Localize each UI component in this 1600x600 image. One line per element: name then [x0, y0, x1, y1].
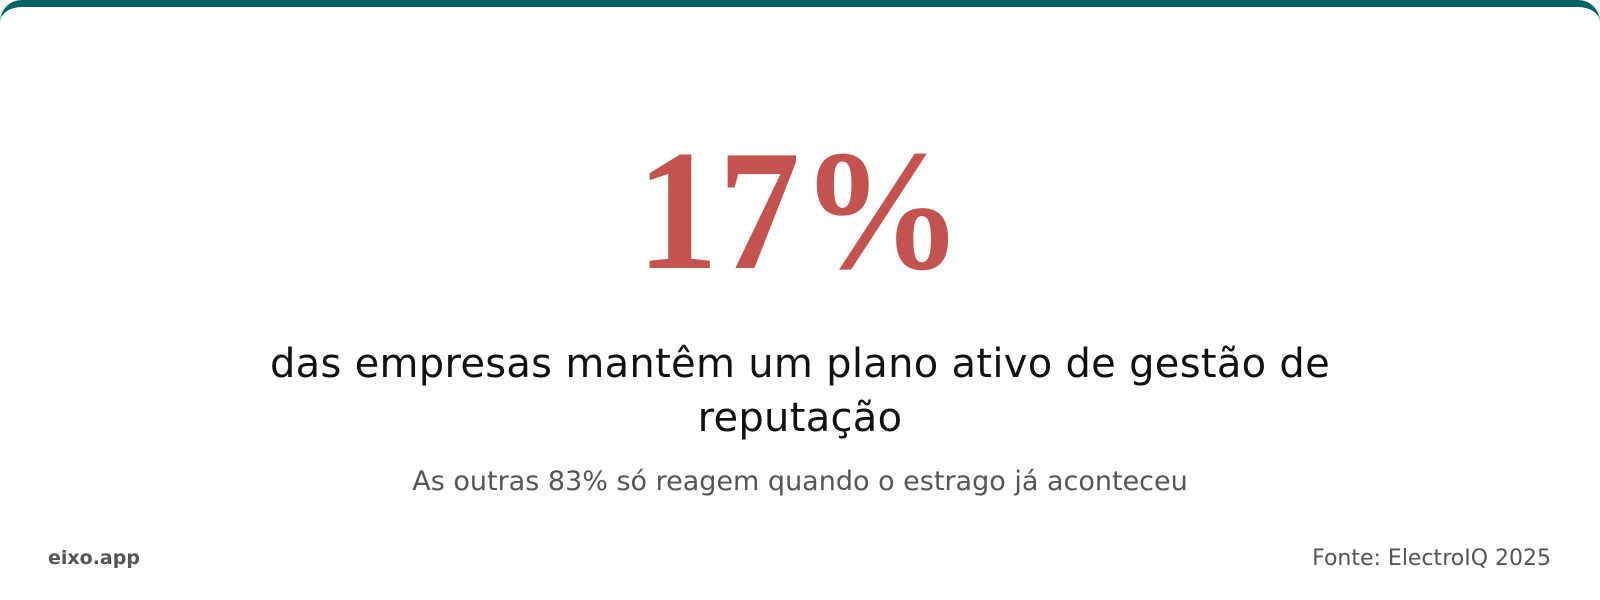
- subtitle: As outras 83% só reagem quando o estrago já aconteceu: [412, 466, 1188, 497]
- footer brand: eixo.app: [48, 547, 140, 569]
- footer source: Fonte: ElectroIQ 2025: [1312, 546, 1551, 571]
- headline: das empresas mantêm um plano ativo de gestão de reputação: [270, 341, 1330, 441]
- big stat: 17%: [637, 116, 963, 306]
